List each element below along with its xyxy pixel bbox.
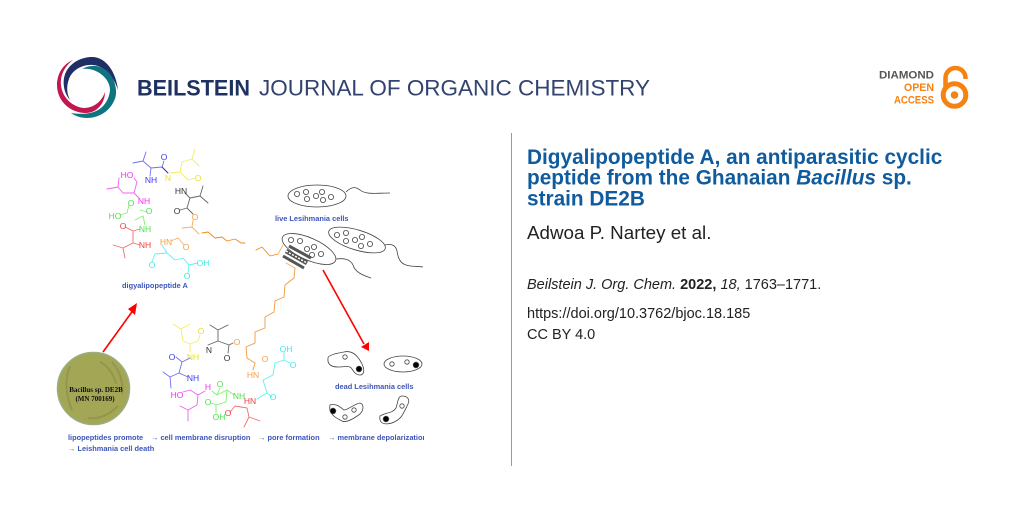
molecule: digyalipopeptide A (top): NH [139,224,151,234]
molecule: digyalipopeptide A (bottom): NH [187,373,199,383]
authors: Adwoa P. Nartey et al. [527,222,711,243]
molecule: digyalipopeptide A (bottom): O [169,352,176,362]
molecule: digyalipopeptide A (bottom): HN [247,370,259,380]
molecule: digyalipopeptide A (top): O [174,206,181,216]
molecule: digyalipopeptide A (bottom): OH [213,412,225,422]
article title: strain DE2B [527,188,645,210]
live Leishmania cell 2 [328,226,423,268]
molecule: digyalipopeptide A (bottom): O [205,397,212,407]
bacterial culture plate [58,352,130,424]
molecule: digyalipopeptide A (bottom): NH [233,391,245,401]
diamond open access badge: ACCESS [894,94,934,106]
molecule: digyalipopeptide A (top): NH [138,196,150,206]
journal name: BEILSTEIN [137,76,250,100]
molecule: digyalipopeptide A (top): NH [145,175,157,185]
molecule: digyalipopeptide A (bottom): O [217,379,224,389]
mechanism caption: lipopeptides promote [68,433,143,442]
arrow: plate to molecule [103,303,137,352]
molecule: digyalipopeptide A (top): O [128,198,135,208]
molecule: digyalipopeptide A (top): OH [197,258,209,268]
label: dead cells: dead Lesihmania cells [335,382,413,391]
molecule: digyalipopeptide A (top): O [195,173,202,183]
live Leishmania cell 1 [288,185,390,207]
molecule: digyalipopeptide A (bottom): NH [187,352,199,362]
molecule: digyalipopeptide A (top): O [149,260,156,270]
molecule: digyalipopeptide A (bottom): O [290,360,297,370]
citation [527,277,821,343]
live cell with membrane pore [282,233,372,278]
mechanism caption [68,434,424,451]
molecule: digyalipopeptide A (bottom): N [206,345,212,355]
molecule: digyalipopeptide A (top) [107,149,295,370]
bacterial culture plate: Bacillus sp. DE2B [69,386,123,394]
dead cell 3 [330,403,363,422]
citation: https://doi.org/10.3762/bjoc.18.185 [527,306,750,322]
mechanism caption: → Leishmania cell death [68,444,155,453]
label: digyalipopeptide A: digyalipopeptide A [122,281,188,290]
dead cell 2 [384,356,422,372]
molecule: digyalipopeptide A (top): HN [175,186,187,196]
arrow: live to dead cells [323,270,369,351]
article title: peptide from the Ghanaian Bacillus sp. [527,166,912,190]
label: live cells: live Lesihmania cells [275,214,349,223]
molecule: digyalipopeptide A (bottom): O [270,392,277,402]
molecule: digyalipopeptide A (bottom): O [224,353,231,363]
molecule: digyalipopeptide A (top): HN [160,237,172,247]
molecule: digyalipopeptide A (top): N [165,173,171,183]
molecule: digyalipopeptide A (top): HO [121,170,134,180]
dead cell 1 [328,352,364,375]
article title [527,146,942,210]
molecule: digyalipopeptide A (top): O [146,206,153,216]
bacterial culture plate: (MN 700169) [75,395,115,403]
molecule: digyalipopeptide A (bottom): O [225,408,232,418]
article title: Digyalipopeptide A, an antiparasitic cyclic [527,146,942,169]
mechanism caption: → pore formation [258,433,320,442]
citation: Beilstein J. Org. Chem. 2022, 18, 1763–1771. [527,277,821,293]
journal logo: swirl [57,57,118,118]
dead cell 4 [380,396,409,424]
molecule: digyalipopeptide A (bottom): OH [280,344,292,354]
molecule: digyalipopeptide A (top): NH [139,240,151,250]
molecule: digyalipopeptide A (bottom): HN [244,396,256,406]
molecule: digyalipopeptide A (top): HO [109,211,122,221]
molecule: digyalipopeptide A (bottom): O [262,354,269,364]
molecule: digyalipopeptide A (bottom): O [234,337,241,347]
molecule: digyalipopeptide A (bottom): H [205,382,211,392]
journal name: JOURNAL OF ORGANIC CHEMISTRY [259,76,650,100]
diamond open access badge: OPEN [904,82,934,94]
citation: CC BY 4.0 [527,327,595,343]
mechanism caption: → cell membrane disruption [151,433,251,442]
diamond open access badge: DIAMOND [879,70,934,82]
diamond open access badge [879,68,966,106]
molecule: digyalipopeptide A (bottom): HO [171,390,184,400]
figure: graphical abstract [58,149,427,453]
molecule: digyalipopeptide A (top): O [183,242,190,252]
molecule: digyalipopeptide A (top): O [192,212,199,222]
molecule: digyalipopeptide A (top): O [184,271,191,281]
molecule: digyalipopeptide A (bottom): O [198,326,205,336]
mechanism caption: → membrane depolarization [328,433,427,442]
vertical divider [510,133,512,466]
molecule: digyalipopeptide A (top): O [161,152,168,162]
molecule: digyalipopeptide A (bottom) [163,324,297,427]
molecule: digyalipopeptide A (top): O [120,221,127,231]
